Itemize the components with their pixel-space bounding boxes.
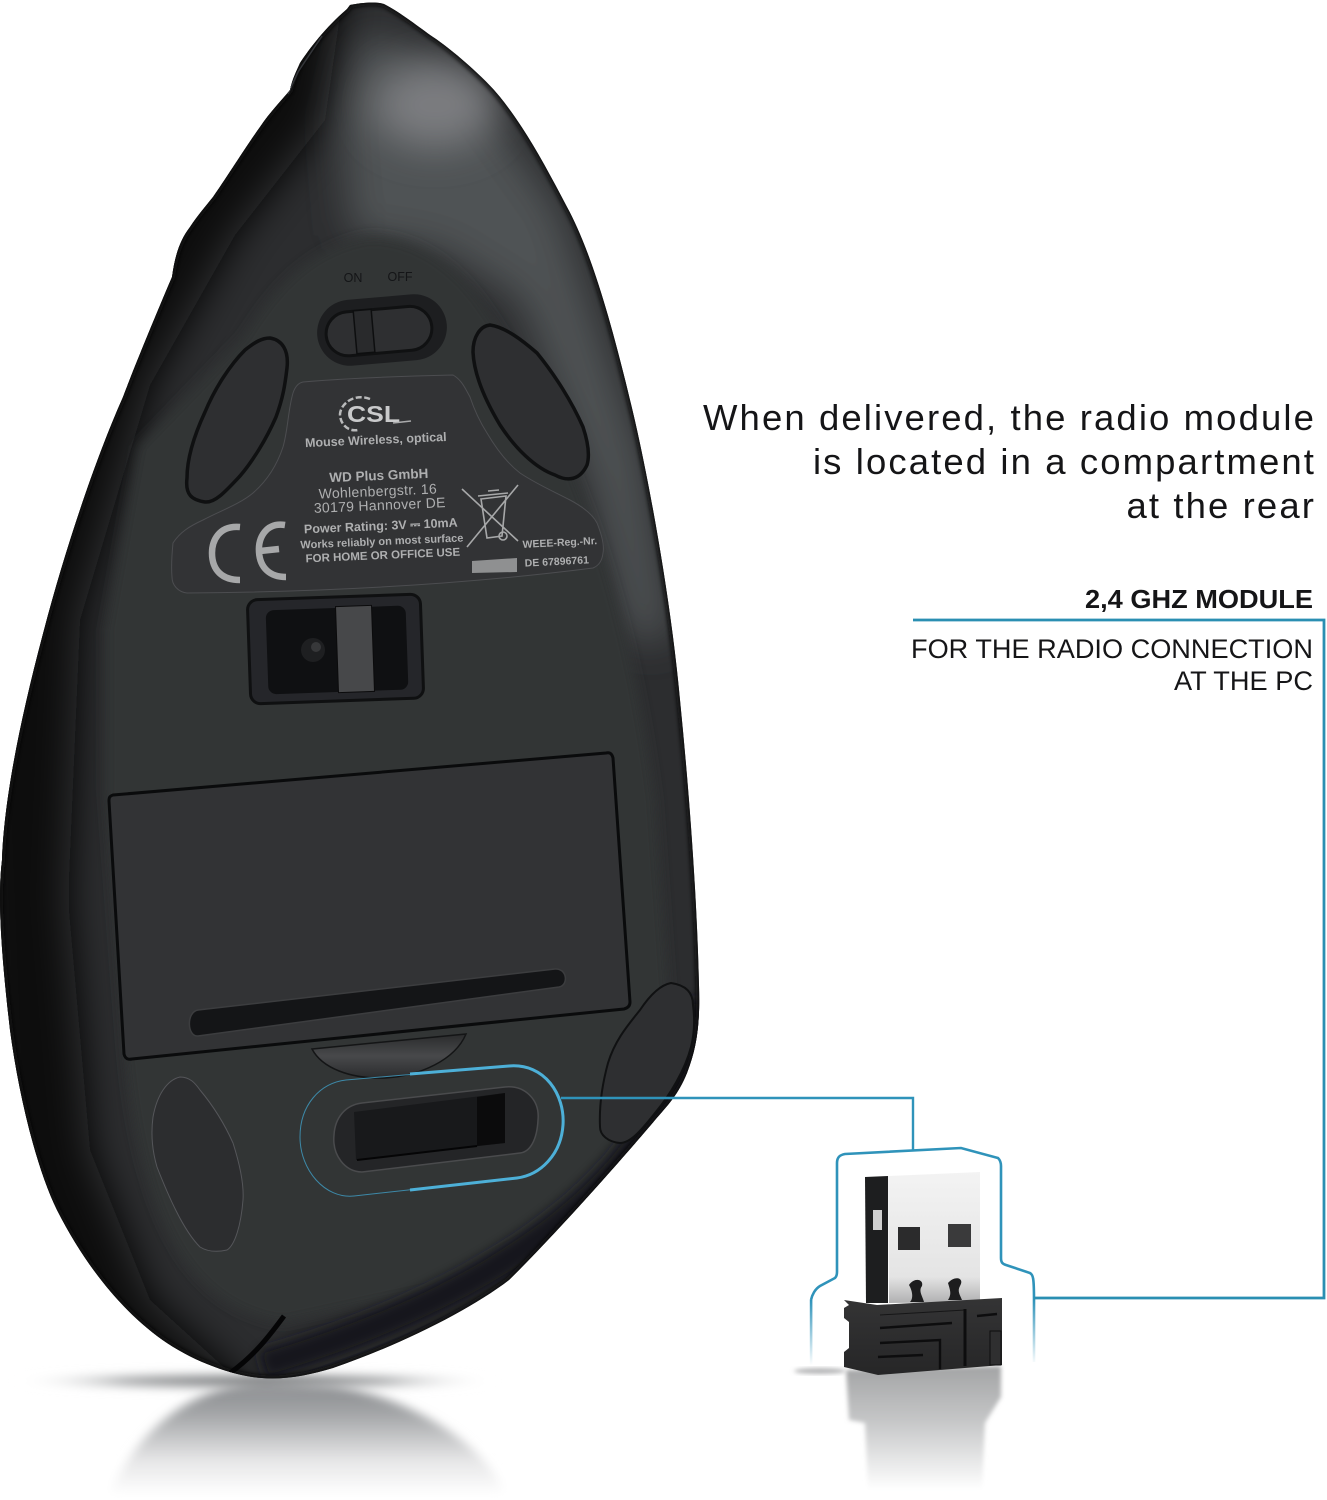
optical sensor window	[247, 594, 424, 704]
label text: WEEE-Reg.-Nr.	[522, 535, 598, 551]
module description	[911, 634, 1313, 696]
battery cover	[109, 753, 630, 1059]
label text: FOR HOME OR OFFICE USE	[305, 547, 461, 565]
label text: 30179 Hannover DE	[314, 494, 446, 516]
label text: Works reliably on most surface	[300, 532, 464, 552]
label text: WD Plus GmbH	[329, 466, 429, 485]
mouse floor shadow and reflection	[10, 1372, 505, 1495]
CE mark	[212, 525, 286, 580]
heading	[703, 397, 1316, 526]
product label plate	[172, 375, 603, 593]
reflection	[846, 1366, 1001, 1490]
label text: Wohlenbergstr. 16	[318, 480, 437, 502]
heading: When delivered, the radio module	[703, 397, 1316, 438]
blue outline	[300, 1066, 563, 1196]
cover slot	[189, 969, 565, 1036]
power switch: OFF	[388, 270, 413, 284]
label text: Power Rating: 3V ⎓ 10mA	[304, 516, 458, 536]
module compartment with highlight	[300, 1066, 563, 1196]
left upper rubber foot	[187, 338, 287, 502]
power switch	[314, 270, 450, 369]
module label: 2,4 GHZ MODULE	[1085, 586, 1313, 614]
USB plug metal	[888, 1172, 980, 1303]
heading: is located in a compartment	[813, 441, 1316, 482]
label text: DE 67896761	[524, 554, 589, 570]
USB plug dark side	[865, 1176, 888, 1303]
scroll ball	[312, 1034, 466, 1078]
mouse body	[0, 2, 699, 1378]
CSL logo: CSL	[347, 401, 400, 427]
dongle housing	[844, 1298, 1002, 1375]
label text	[300, 430, 598, 570]
WEEE crossed bin	[462, 485, 518, 547]
connector line from module to label	[913, 620, 1324, 1298]
CSL logo	[340, 397, 411, 430]
connector line from compartment to module	[561, 1098, 913, 1151]
heading: at the rear	[1127, 485, 1316, 526]
module description: AT THE PC	[1174, 666, 1313, 696]
module description: FOR THE RADIO CONNECTION	[911, 634, 1313, 664]
label text: Mouse Wireless, optical	[305, 430, 447, 450]
lower right rubber foot	[600, 983, 694, 1143]
WEEE bar	[472, 558, 517, 573]
USB nano receiver	[794, 1172, 1002, 1490]
power switch: ON	[344, 271, 362, 285]
right upper rubber foot	[473, 325, 588, 479]
lower left rubber foot	[152, 1077, 243, 1251]
blue outline around USB module	[811, 1148, 1034, 1365]
wireless vertical mouse, underside	[0, 0, 700, 1500]
